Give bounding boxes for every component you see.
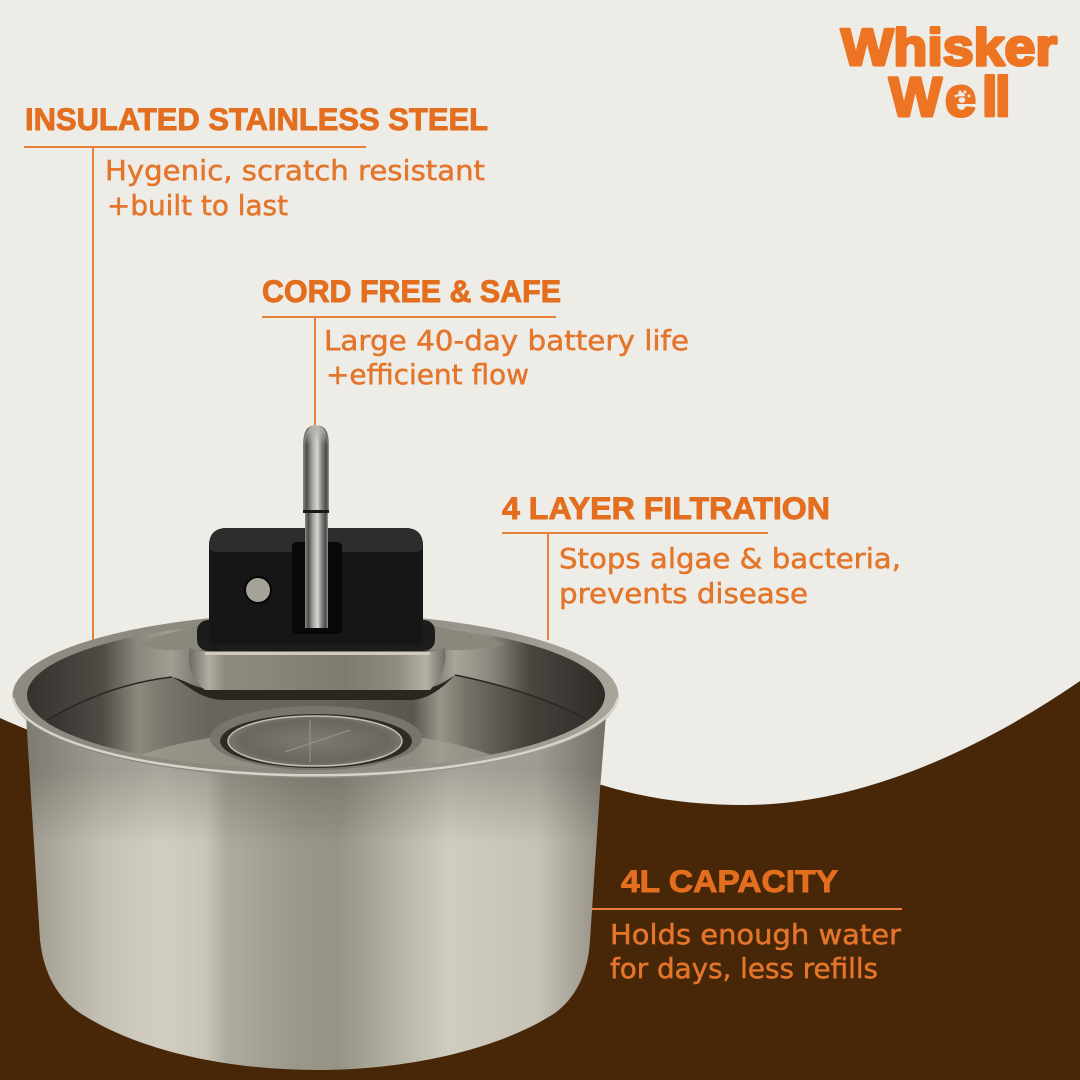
bowl floor (46, 674, 586, 770)
platform lip (205, 652, 430, 655)
product: stainless steel fountain (12, 425, 618, 1070)
callout: 4L capacity (591, 863, 902, 985)
spout slot (292, 542, 342, 634)
callout: cord free and safe (262, 273, 689, 430)
pump base (197, 620, 435, 651)
logo: Whisker Well: Well (889, 65, 1011, 128)
bowl rim (12, 613, 618, 778)
heading: INSULATED STAINLESS STEEL (25, 101, 488, 137)
bowl interior (27, 620, 605, 770)
logo: Whisker Well (841, 19, 1057, 128)
raised platform (189, 648, 446, 690)
callout: 4 layer filtration (502, 490, 901, 640)
description: +built to last (107, 190, 288, 222)
heading: 4L CAPACITY (621, 863, 838, 899)
description: Holds enough water (610, 919, 902, 951)
filter disc (210, 706, 422, 770)
description: for days, less refills (610, 953, 878, 985)
description: prevents disease (559, 578, 808, 610)
leader line (502, 533, 768, 640)
heading: CORD FREE & SAFE (262, 273, 561, 309)
front rim highlight (13, 698, 618, 775)
interior ledge (135, 627, 505, 650)
brown wave background (0, 681, 1080, 1080)
icon: paw in logo (954, 90, 970, 103)
pump housing (209, 528, 423, 644)
heading: 4 LAYER FILTRATION (502, 490, 830, 526)
description: Large 40-day battery life (324, 325, 689, 357)
spout (303, 425, 329, 628)
leader line (24, 147, 366, 640)
pump top surface (209, 528, 423, 552)
platform shadow (172, 675, 455, 700)
floor edge line (47, 675, 585, 720)
description: Stops algae & bacteria, (559, 543, 901, 575)
power button (244, 576, 272, 604)
description: +efficient flow (326, 359, 529, 391)
leader line (262, 317, 556, 430)
logo: Whisker Well: Whisker (841, 19, 1057, 77)
description: Hygenic, scratch resistant (105, 155, 485, 187)
bowl body (26, 715, 606, 1070)
divider line (591, 908, 902, 910)
floor reflection (142, 738, 490, 770)
callout: insulated stainless steel (24, 101, 488, 640)
